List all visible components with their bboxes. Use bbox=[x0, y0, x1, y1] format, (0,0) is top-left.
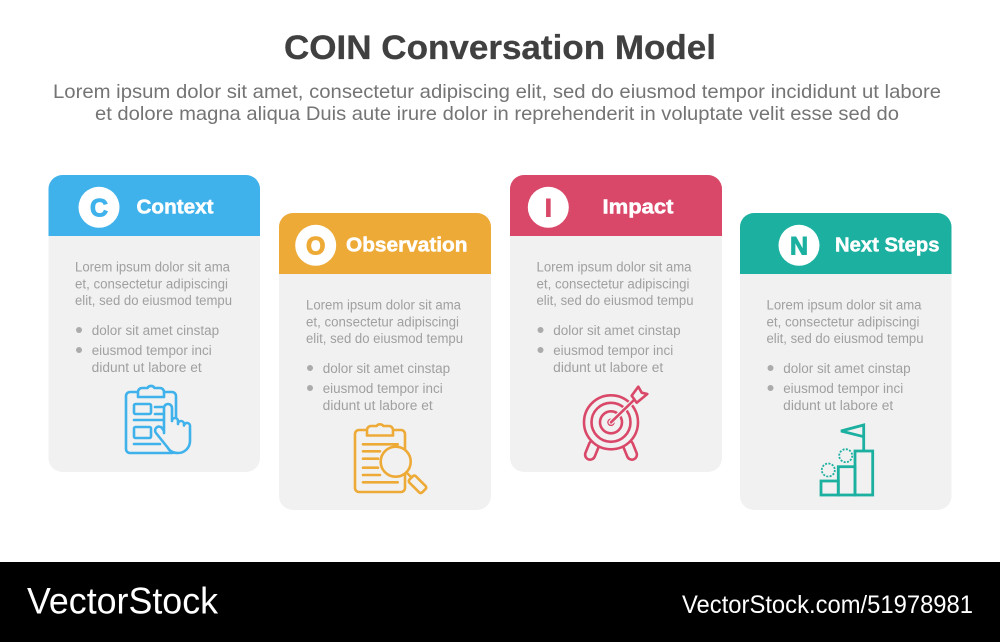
body text: Next Steps: Lorem ipsum dolor sit ama bbox=[766, 298, 922, 313]
body text: Impact: didunt ut labore et bbox=[553, 360, 663, 375]
icon: target with arrow bbox=[584, 387, 647, 461]
letter badge: I: I bbox=[545, 194, 552, 222]
body text: Impact: et, consectetur adipiscingi bbox=[536, 276, 690, 292]
body text: Next Steps: et, consectetur adipiscingi bbox=[766, 314, 920, 330]
footer URL text: VectorStock.com/51978981 bbox=[682, 591, 973, 619]
panel: Impact bbox=[510, 175, 722, 472]
body text: Next Steps: didunt ut labore et bbox=[783, 398, 893, 413]
icon: steps with flag bbox=[821, 425, 873, 495]
body text: Context: et, consectetur adipiscingi bbox=[75, 276, 228, 292]
body text: Context: eiusmod tempor inci bbox=[92, 343, 212, 358]
body text: Next Steps bbox=[766, 298, 924, 413]
icon: clipboard with hand bbox=[126, 386, 190, 453]
body text: Observation: didunt ut labore et bbox=[323, 398, 433, 413]
body text: Context: dolor sit amet cinstap bbox=[92, 323, 219, 338]
header: Observation bbox=[279, 213, 491, 274]
letter badge: N: N bbox=[790, 232, 808, 260]
heading: Next Steps: Next Steps bbox=[835, 234, 940, 256]
letter badge: I bbox=[528, 187, 569, 228]
body text: Observation: Lorem ipsum dolor sit ama bbox=[306, 298, 461, 313]
body text: Context: elit, sed do eiusmod tempu bbox=[75, 293, 232, 308]
body text: Observation: et, consectetur adipiscingi bbox=[306, 314, 459, 330]
panel: Context bbox=[48, 175, 260, 472]
body text: Observation bbox=[306, 298, 463, 413]
footer bar bbox=[0, 562, 1000, 642]
body text: Impact: dolor sit amet cinstap bbox=[553, 323, 681, 338]
body text: Impact: elit, sed do eiusmod tempu bbox=[536, 293, 694, 308]
body text: Observation: dolor sit amet cinstap bbox=[323, 361, 450, 376]
subtitle text: Lorem ipsum dolor sit amet, consectetur adipiscing elit, sed do eiusmod tempor incididunt ut labore bbox=[53, 81, 941, 103]
body text: Context bbox=[75, 260, 232, 375]
body text: Impact bbox=[536, 260, 694, 375]
subtitle text: et dolore magna aliqua Duis aute irure dolor in reprehenderit in voluptate velit esse sed do bbox=[95, 103, 899, 125]
header: Impact bbox=[510, 175, 722, 236]
body text: Observation: eiusmod tempor inci bbox=[323, 381, 443, 396]
body text: Next Steps: dolor sit amet cinstap bbox=[783, 361, 911, 376]
header: Context bbox=[48, 175, 260, 236]
panel: Next Steps bbox=[740, 213, 952, 510]
body text: Next Steps: eiusmod tempor inci bbox=[783, 381, 903, 396]
panel: Observation bbox=[279, 213, 491, 510]
letter badge: O bbox=[295, 225, 336, 266]
header: Next Steps bbox=[740, 213, 952, 274]
body text: Observation: elit, sed do eiusmod tempu bbox=[306, 331, 463, 346]
letter badge: C: C bbox=[90, 194, 108, 222]
heading: Context: Context bbox=[136, 196, 214, 218]
footer logo text: VectorStock bbox=[27, 580, 218, 622]
subtitle text bbox=[53, 81, 941, 125]
body text: Impact: Lorem ipsum dolor sit ama bbox=[536, 260, 692, 275]
body text: Next Steps: elit, sed do eiusmod tempu bbox=[766, 331, 924, 346]
body text: Context: didunt ut labore et bbox=[92, 360, 202, 375]
letter badge: C bbox=[78, 187, 120, 228]
body text: Context: Lorem ipsum dolor sit ama bbox=[75, 260, 230, 275]
body text: Impact: eiusmod tempor inci bbox=[553, 343, 673, 358]
letter badge: O: O bbox=[306, 232, 325, 260]
icon: clipboard with magnifier bbox=[355, 424, 427, 494]
heading: Observation: Observation bbox=[346, 234, 468, 256]
title: COIN Conversation Model bbox=[284, 29, 716, 67]
letter badge: N bbox=[778, 225, 820, 266]
heading: Impact: Impact bbox=[602, 196, 674, 218]
